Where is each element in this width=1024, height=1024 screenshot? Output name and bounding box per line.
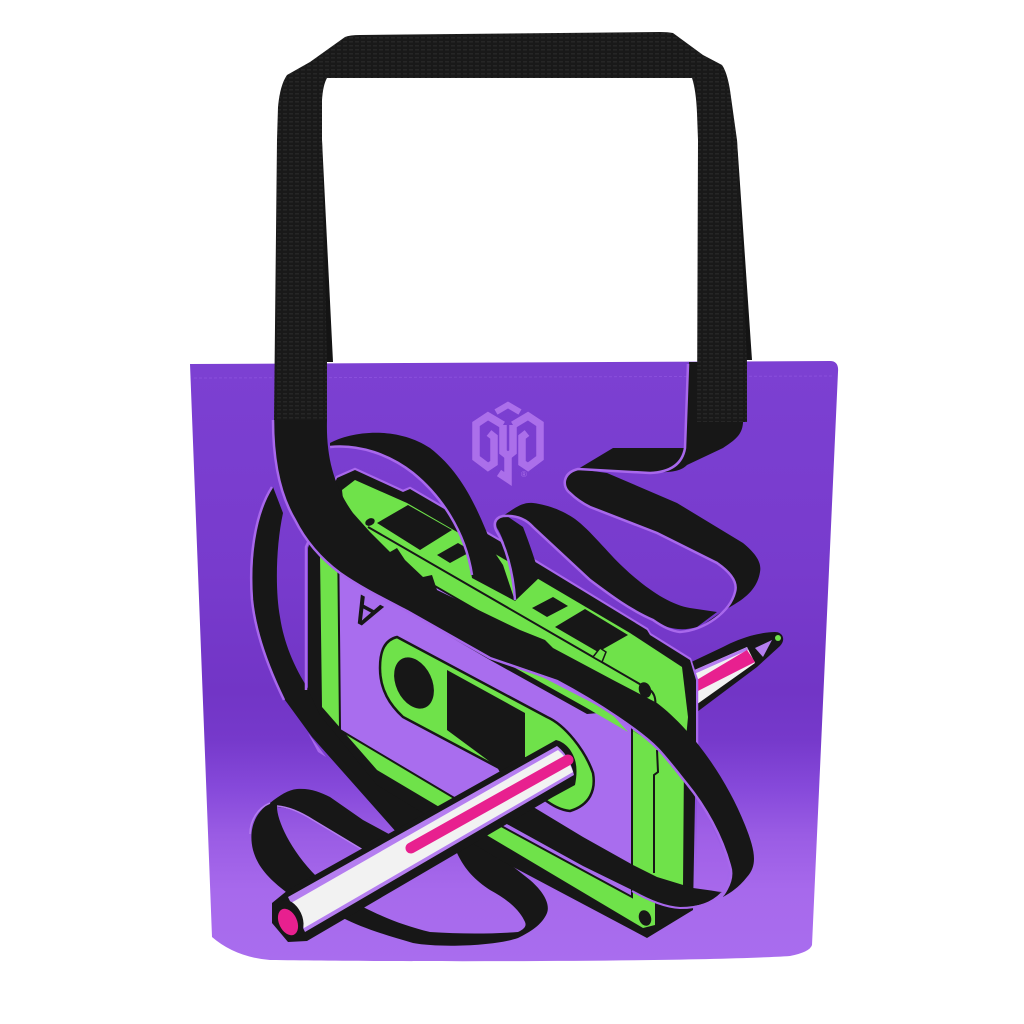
strand light edge xyxy=(632,891,722,908)
tape: left loop and lower strands behind cassette xyxy=(250,487,548,946)
green sliver under main band xyxy=(483,650,628,732)
label window xyxy=(447,670,535,790)
descending strip xyxy=(503,503,717,629)
cassette face xyxy=(338,530,632,897)
dark wedge under main band xyxy=(408,612,610,714)
pencil body xyxy=(271,740,576,942)
logo: ® xyxy=(521,470,527,479)
pencil end xyxy=(271,896,309,940)
handle: back straps xyxy=(320,140,752,362)
lower screw xyxy=(637,908,653,928)
tape: strand from pencil to tip xyxy=(505,805,722,907)
top strip joining right handle xyxy=(578,362,743,472)
lower crescent strand xyxy=(343,840,548,946)
cassette xyxy=(306,469,697,938)
left loop light edge xyxy=(251,487,284,700)
letter A: A xyxy=(345,587,388,636)
spool hole xyxy=(386,651,442,715)
cassette outer rim xyxy=(306,469,697,745)
cassette front frame xyxy=(320,555,684,928)
tape: inner loop highlight xyxy=(697,792,730,893)
tape: S curve xyxy=(495,362,760,632)
right column groove xyxy=(654,750,658,873)
right loop xyxy=(566,469,760,627)
cassette outer shell xyxy=(308,470,696,938)
label xyxy=(380,637,594,811)
tape: upper back loop xyxy=(330,433,515,601)
lower left loop xyxy=(251,789,400,895)
main band light edge xyxy=(273,420,731,895)
tape: main band from left handle xyxy=(274,420,754,897)
cassette top edge xyxy=(342,480,688,760)
pink stripe xyxy=(411,760,568,848)
bag body xyxy=(190,361,838,961)
handle: front straps xyxy=(274,32,747,422)
pencil tip behind cassette xyxy=(685,632,783,715)
tape fold stub xyxy=(496,516,540,601)
light tape edge xyxy=(495,364,736,632)
logo xyxy=(476,405,540,479)
top edge windows xyxy=(364,505,653,700)
